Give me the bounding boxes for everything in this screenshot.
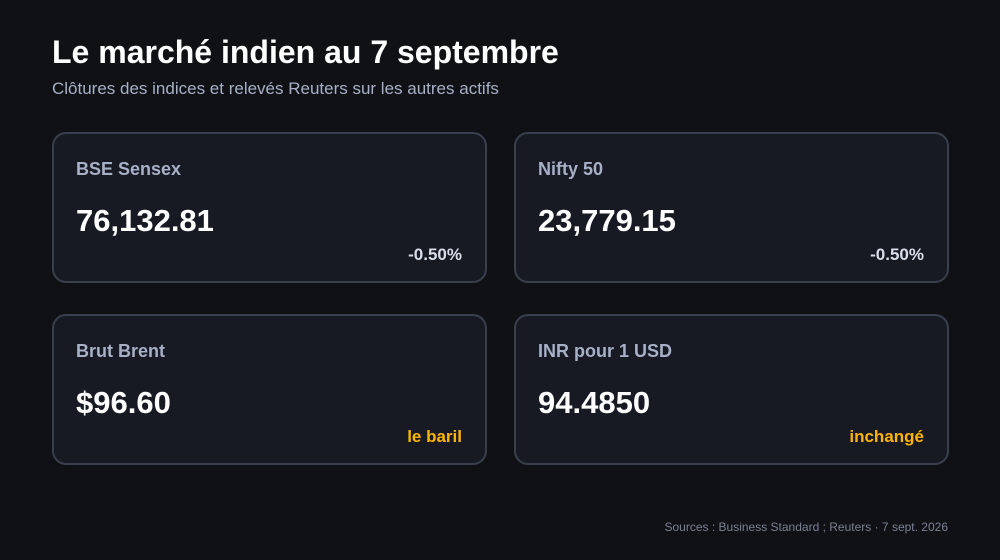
panel: Nifty 50 (514, 132, 949, 283)
change: Nifty 50: -0.50% (870, 245, 924, 264)
note: Brut Brent: le baril (407, 427, 462, 446)
change: BSE Sensex: -0.50% (408, 245, 462, 264)
panel: Brut Brent (52, 314, 487, 465)
subtitle: Clôtures des indices et relevés Reuters sur les autres actifs (52, 79, 499, 98)
value: INR pour 1 USD: 94.4850 (538, 385, 650, 420)
value: BSE Sensex: 76,132.81 (76, 203, 214, 238)
label: Brut Brent: Brut Brent (76, 341, 165, 361)
source footer: Sources : Business Standard ; Reuters · 7 sept. 2026 (664, 520, 948, 534)
value: Nifty 50: 23,779.15 (538, 203, 676, 238)
label: Nifty 50: Nifty 50 (538, 159, 603, 179)
title: Le marché indien au 7 septembre (52, 34, 559, 70)
value: Brut Brent: $96.60 (76, 385, 171, 420)
label: BSE Sensex: BSE Sensex (76, 159, 181, 179)
note: INR pour 1 USD: inchangé (849, 427, 924, 446)
panel: BSE Sensex (52, 132, 487, 283)
panel: INR pour 1 USD (514, 314, 949, 465)
label: INR pour 1 USD: INR pour 1 USD (538, 341, 672, 361)
